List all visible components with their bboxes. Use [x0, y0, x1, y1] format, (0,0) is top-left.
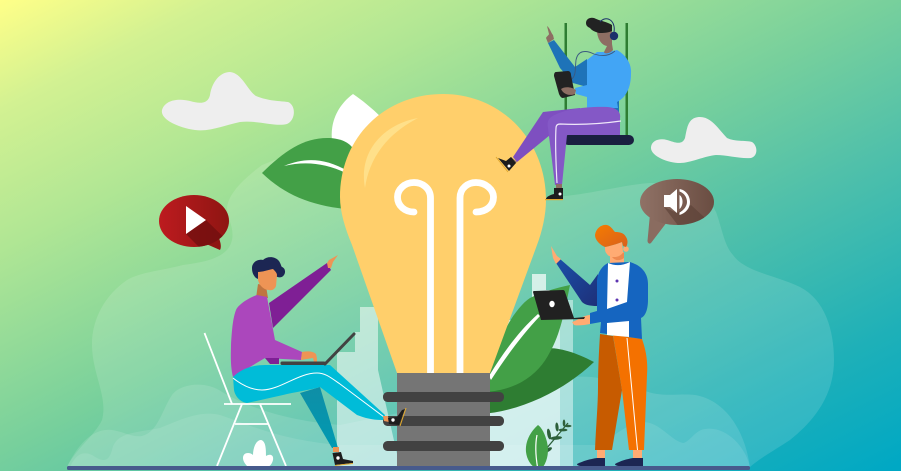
plant leaf vein	[536, 435, 538, 467]
shirt upper	[607, 262, 630, 309]
front shoe	[388, 408, 406, 426]
jacket	[590, 262, 648, 339]
bubble tail	[204, 235, 221, 250]
hair	[595, 225, 628, 247]
base ring 2	[383, 416, 504, 426]
back arm	[556, 259, 598, 306]
earphone wire	[572, 51, 615, 79]
pants dark	[595, 334, 622, 450]
building right	[490, 274, 560, 467]
hand on tablet	[561, 87, 576, 95]
bulb glass	[340, 94, 546, 373]
swing rope right	[626, 23, 628, 137]
under arm shadow	[265, 358, 279, 364]
plant leaf	[526, 425, 548, 467]
tablet	[554, 71, 575, 98]
lightbulb	[340, 94, 546, 467]
cloud right	[651, 117, 756, 163]
small plant	[526, 420, 572, 467]
neck	[256, 284, 268, 298]
pants stripe	[627, 338, 638, 450]
neck and head	[597, 30, 613, 53]
shirt lower	[607, 321, 629, 337]
speaker shadow	[664, 205, 704, 225]
leg stripe	[556, 121, 621, 183]
leg line	[233, 373, 384, 417]
speaker icon	[664, 189, 690, 215]
swing rope left	[564, 23, 567, 137]
hand on laptop	[301, 351, 317, 362]
back shoe	[496, 157, 516, 172]
background blob front layer	[70, 414, 750, 467]
torso	[575, 50, 631, 108]
base ring 1	[383, 392, 504, 402]
headphones	[600, 19, 618, 40]
person standing with laptop	[533, 225, 648, 466]
raised arm	[548, 40, 587, 87]
city buildings	[337, 274, 573, 467]
back ankle	[508, 157, 517, 164]
back leg	[513, 108, 580, 162]
person with laptop seated	[204, 255, 406, 467]
pointing hand	[327, 255, 338, 268]
back arm	[269, 263, 331, 328]
play speech bubble	[159, 195, 229, 250]
audio speech bubble	[640, 179, 716, 244]
front leg and hip	[233, 365, 385, 420]
back leg	[300, 387, 338, 448]
building left	[337, 307, 400, 467]
torso	[231, 295, 302, 377]
background blob large	[67, 130, 834, 467]
neck	[610, 252, 624, 266]
face	[258, 269, 277, 290]
bulb highlight	[364, 118, 418, 188]
lower back shirt	[607, 100, 619, 114]
building right edge	[560, 300, 573, 467]
bulb base	[397, 373, 490, 467]
hair	[252, 257, 285, 279]
front ankle	[383, 416, 389, 422]
front leg	[548, 107, 620, 185]
play shadow	[186, 220, 222, 247]
bubble body	[159, 195, 229, 247]
chair	[204, 333, 291, 466]
laptop	[533, 290, 585, 320]
base ring 3	[383, 441, 504, 451]
back shoe	[332, 452, 353, 466]
leaf vein right	[489, 314, 540, 380]
laptop hand	[572, 315, 590, 325]
play triangle	[186, 206, 206, 234]
hair	[586, 18, 612, 33]
ground line	[67, 466, 750, 470]
ankles	[597, 450, 642, 458]
front shoe	[545, 188, 563, 200]
plant sprig	[543, 420, 572, 454]
swing seat	[563, 135, 634, 145]
bulb filament	[398, 182, 494, 373]
person on swing	[496, 18, 634, 200]
leaf vein left	[284, 160, 348, 173]
background blob mid layer	[67, 377, 750, 467]
ear	[623, 246, 629, 252]
leaf mid green right	[485, 285, 570, 392]
pointing hand	[551, 246, 561, 264]
leaf green left	[262, 138, 355, 209]
neck shadow	[612, 252, 624, 260]
cloud left	[162, 72, 294, 130]
bubble body	[640, 179, 714, 225]
back ankle	[333, 447, 339, 452]
front ankle	[556, 184, 562, 190]
bubble tail	[648, 214, 667, 244]
leaf dark green right	[480, 348, 594, 414]
face	[605, 242, 623, 257]
leaf white	[332, 94, 384, 152]
raised hand	[546, 26, 554, 43]
pants light	[613, 335, 647, 450]
shirt buttons	[616, 280, 618, 302]
laptop	[280, 334, 354, 365]
white plant	[243, 440, 273, 467]
shoes	[577, 458, 643, 466]
clouds	[162, 72, 756, 163]
